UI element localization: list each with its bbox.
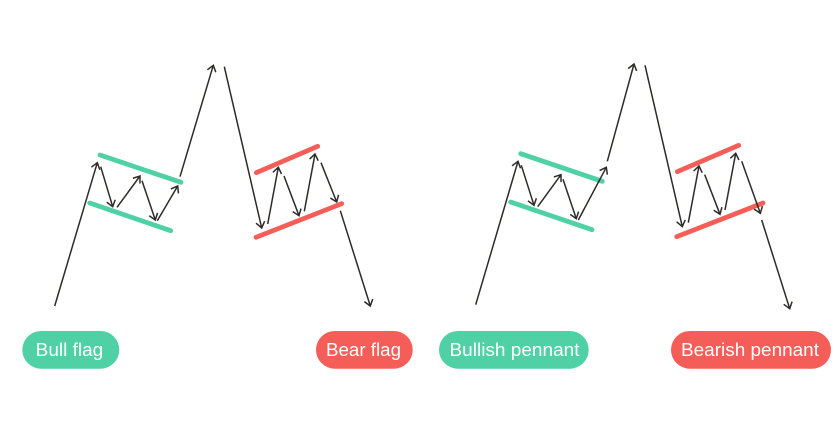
lower pennant boundary [677, 203, 763, 237]
upper pennant boundary [521, 154, 602, 181]
price path arrows [224, 67, 370, 306]
lower pennant boundary [511, 202, 592, 230]
label: bearish pennant: Bearish pennant [681, 340, 819, 360]
upper pennant boundary [677, 145, 739, 172]
label: bear flag [316, 331, 413, 369]
price path arrows [645, 65, 790, 309]
lower flag boundary [90, 203, 171, 231]
upper flag boundary [100, 155, 181, 182]
label: bull flag: Bull flag [36, 340, 103, 360]
label: bull flag [22, 331, 119, 369]
price path arrows [55, 65, 213, 306]
upper flag boundary [256, 146, 318, 173]
label: bullish pennant [439, 331, 589, 369]
label: bear flag: Bear flag [326, 340, 401, 360]
chart: bull flag [55, 65, 213, 306]
chart: bear flag [224, 67, 370, 306]
lower flag boundary [256, 204, 342, 237]
label: bullish pennant: Bullish pennant [450, 340, 580, 360]
chart: bullish pennant [476, 64, 634, 305]
chart: bearish pennant [645, 65, 790, 309]
label: bearish pennant [671, 331, 831, 369]
price path arrows [476, 64, 634, 305]
